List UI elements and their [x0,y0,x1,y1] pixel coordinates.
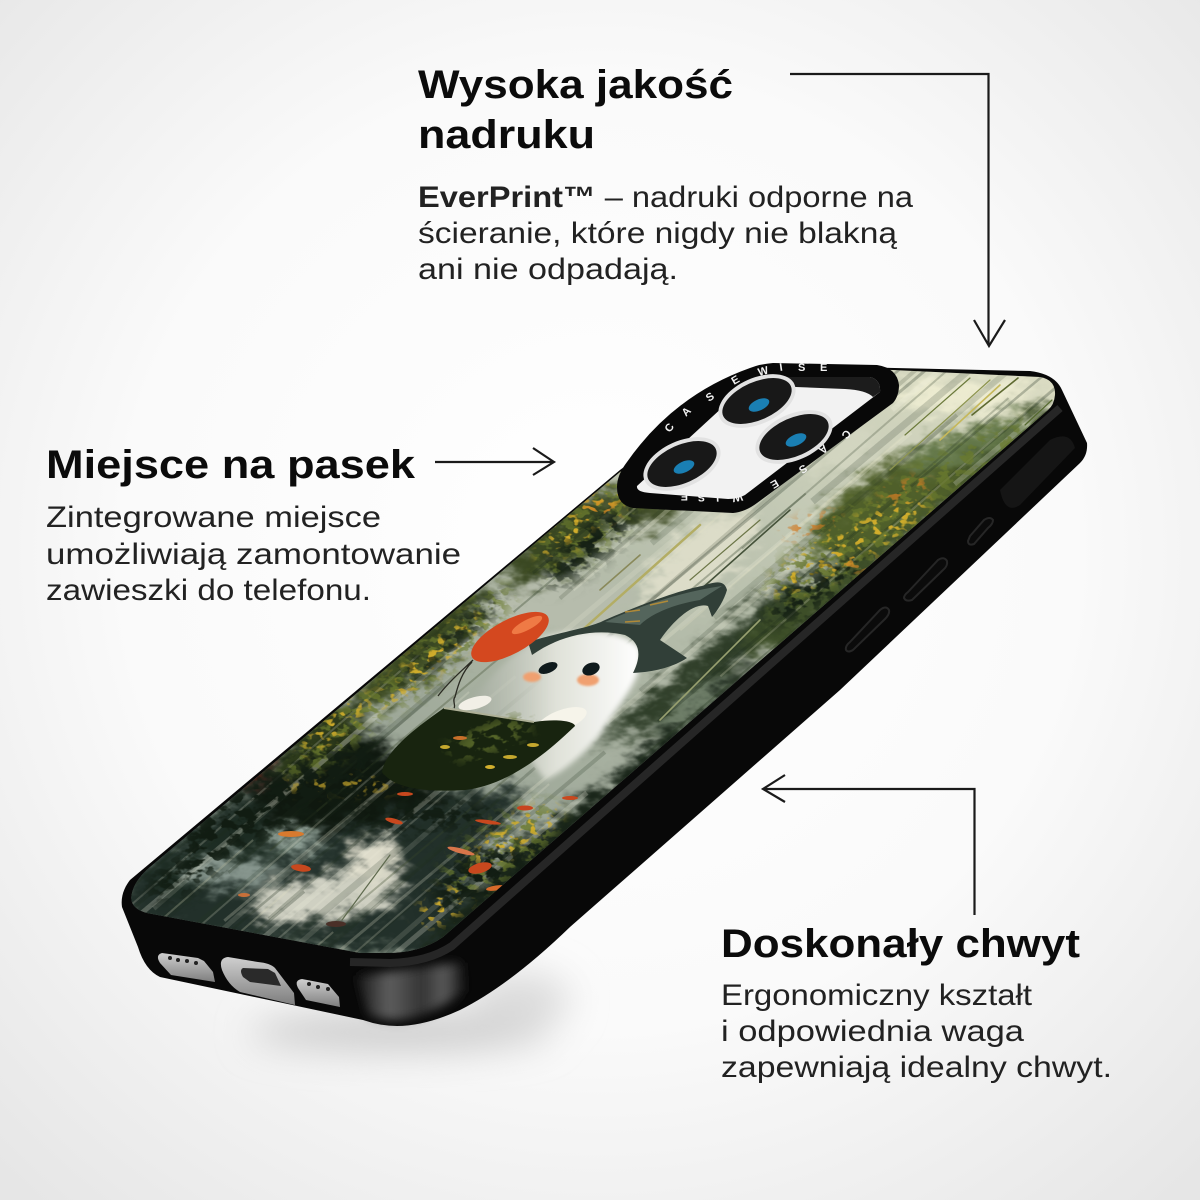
amber foliage [580,474,932,570]
arrow to case side [763,775,974,915]
description: zawieszki do telefonu. [46,574,371,607]
description: Zintegrowane miejsce [46,501,381,534]
camera surround: CASEWISE [681,427,853,504]
phone drop shadow [250,972,570,1052]
description: ani nie odpadają. [418,253,678,286]
description: EverPrint™ – nadruki odporne na [418,181,883,214]
heading: nadruku [418,113,595,157]
heading: Wysoka jakość [418,63,733,107]
side rim highlight [350,408,1060,963]
olive foliage [274,406,1053,913]
rain streaks [342,378,1052,920]
description: ścieranie, które nigdy nie blakną [418,217,898,250]
callout: print quality [418,63,1005,346]
camera lenses [635,363,841,502]
callout: grip [721,775,1112,1084]
description: zapewniają idealny chwyt. [721,1051,1112,1084]
description: Ergonomiczny kształt [721,979,1032,1012]
camera surround [617,362,899,513]
cauldron [382,708,575,791]
charging and speaker ports [158,953,340,1007]
fallen leaves [238,792,578,927]
description: umożliwiają zamontowanie [46,538,461,571]
red balloon [438,612,549,708]
printed artwork [131,370,1056,953]
corner highlight [356,962,466,1020]
description: i odpowiednia waga [721,1015,1025,1048]
painted landscape [120,379,1060,960]
witch hat [528,582,727,673]
directional brush texture [132,370,1055,953]
case body [122,365,1087,1026]
brand text on ring: CASEWISE [663,362,827,435]
ghost figure [457,631,641,780]
arrow to strap slot [435,448,554,475]
side buttons [846,436,1075,652]
heading: Doskonały chwyt [721,922,1080,966]
callout: strap slot [46,443,554,607]
phone case illustration [100,340,1100,1026]
dark undergrowth [139,494,874,924]
arrow to top of case [790,74,1005,346]
heading: Miejsce na pasek [46,443,416,487]
golden foliage [280,469,938,932]
